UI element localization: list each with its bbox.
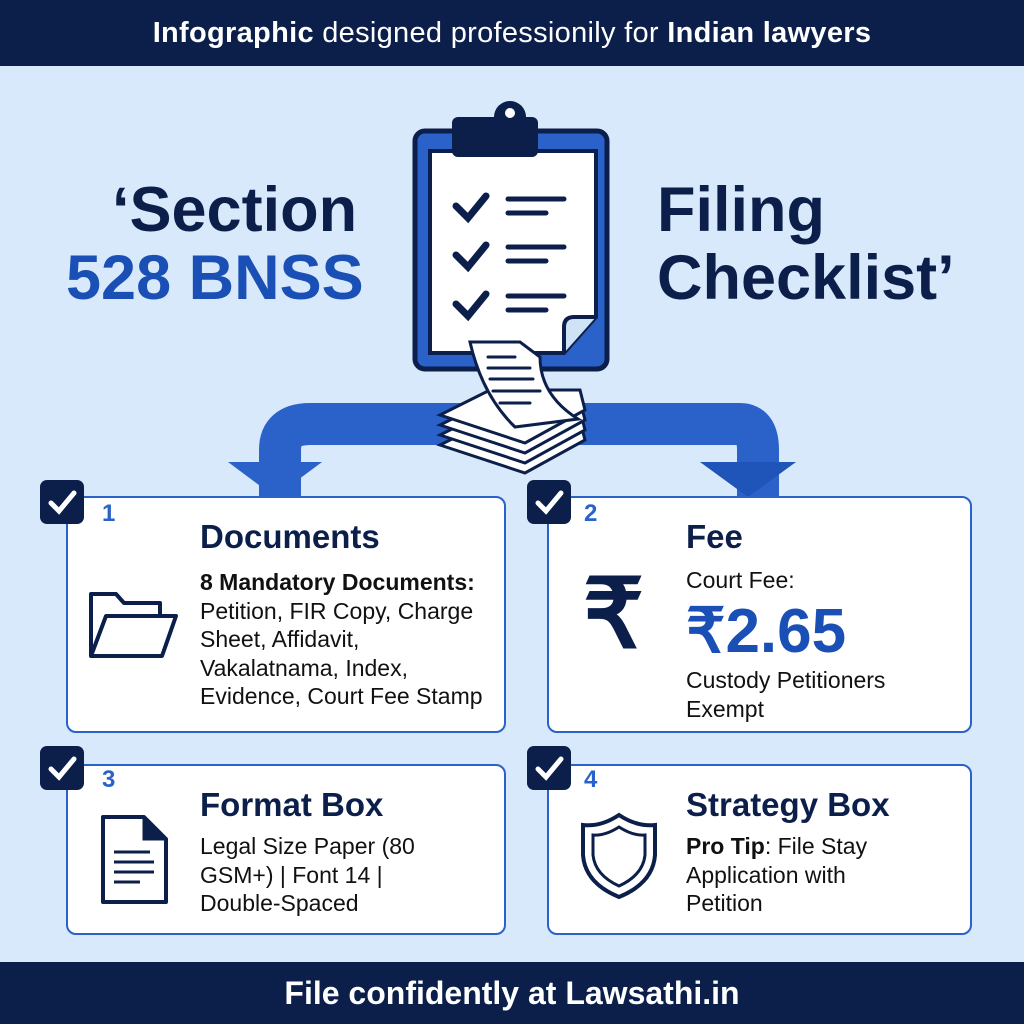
text: Court Fee: xyxy=(686,567,795,593)
note: Exempt xyxy=(686,696,764,722)
top banner xyxy=(0,0,1024,66)
panel: documents xyxy=(66,496,506,733)
text: Application with xyxy=(686,862,846,888)
number 1: 1 xyxy=(102,500,115,527)
icon: rupee: ₹ xyxy=(583,561,644,668)
top banner: Infographic designed professionily for Indian lawyers xyxy=(153,17,871,49)
checkbox 4 xyxy=(527,746,571,790)
heading: Strategy Box xyxy=(686,786,890,823)
text: Evidence, Court Fee Stamp xyxy=(200,683,483,709)
heading: Documents xyxy=(200,518,380,555)
heading: Fee xyxy=(686,518,743,555)
heading: Format Box xyxy=(200,786,383,823)
note xyxy=(686,667,885,722)
number 2: 2 xyxy=(584,500,597,527)
number 3: 3 xyxy=(102,766,115,793)
title right xyxy=(657,175,955,313)
checkbox 1 xyxy=(40,480,84,524)
number 4: 4 xyxy=(584,766,597,793)
text: Pro Tip: File Stay xyxy=(686,833,867,859)
bottom banner: File confidently at Lawsathi.in xyxy=(284,975,740,1011)
icon: shield xyxy=(581,812,657,900)
checkbox 3 xyxy=(40,746,84,790)
title right: Filing xyxy=(657,175,825,245)
checkbox 2 xyxy=(527,480,571,524)
bottom banner xyxy=(0,962,1024,1024)
panel: strategy xyxy=(547,764,972,935)
icon: clipboard xyxy=(412,101,610,475)
title left blue: 528 BNSS xyxy=(66,243,364,313)
text: Legal Size Paper (80 xyxy=(200,833,415,859)
panel: format xyxy=(66,764,506,935)
note: Custody Petitioners xyxy=(686,667,885,693)
text: Petition xyxy=(686,890,763,916)
value: ₹2.65 xyxy=(686,597,846,666)
title right: Checklist’ xyxy=(657,243,955,313)
icon: split arrow xyxy=(228,403,796,496)
title left: ‘Section xyxy=(112,175,357,245)
text: Vakalatnama, Index, xyxy=(200,654,408,680)
panel: fee xyxy=(547,496,972,733)
text xyxy=(686,833,867,916)
icon: folder xyxy=(89,592,178,658)
text: Sheet, Affidavit, xyxy=(200,626,359,652)
text: Double-Spaced xyxy=(200,890,359,916)
text: 8 Mandatory Documents: xyxy=(200,569,475,595)
icon: document xyxy=(101,815,168,904)
text xyxy=(200,833,415,916)
text: GSM+) | Font 14 | xyxy=(200,862,383,888)
text: Petition, FIR Copy, Charge xyxy=(200,598,473,624)
text xyxy=(200,569,483,709)
